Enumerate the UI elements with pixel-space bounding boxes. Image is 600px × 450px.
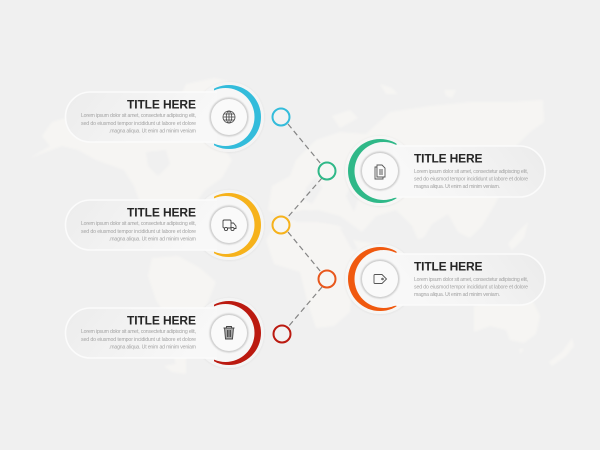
map shading xyxy=(146,150,446,254)
body text xyxy=(81,221,196,243)
body text: Lorem ipsum dolor sit amet, consectetur adipiscing elit, xyxy=(414,277,528,283)
body text xyxy=(81,329,196,351)
icon: truck xyxy=(223,220,236,231)
body text: sed do eiusmod tempor incididunt ut labore et dolore xyxy=(414,176,528,182)
title: TITLE HERE xyxy=(127,206,196,220)
node: yellow xyxy=(272,216,290,234)
node: orange xyxy=(318,270,336,288)
body text: .magna aliqua. Ut enim ad minim veniam xyxy=(109,237,196,243)
world map xyxy=(30,78,574,374)
body text: magna aliqua. Ut enim ad minim veniam. xyxy=(414,292,500,298)
icon: tag xyxy=(374,274,386,284)
body text: Lorem ipsum dolor sit amet, consectetur adipiscing elit, xyxy=(414,169,528,175)
body text: Lorem ipsum dolor sit amet, consectetur adipiscing elit, xyxy=(81,329,196,335)
panel: tag item xyxy=(345,244,545,314)
panel: trash item xyxy=(66,298,264,368)
body text: Lorem ipsum dolor sit amet, consectetur adipiscing elit, xyxy=(81,221,196,227)
node: green xyxy=(318,162,336,180)
title: TITLE HERE xyxy=(127,314,196,328)
title: TITLE HERE xyxy=(127,98,196,112)
icon: globe xyxy=(223,111,235,123)
body text: .magna aliqua. Ut enim ad minim veniam xyxy=(109,345,196,351)
body text xyxy=(414,277,528,298)
body text: sed do eiusmod tempor incididunt ut labore et dolore xyxy=(414,284,528,290)
body text: sed do eiusmod tempor incididunt ut labore et dolore xyxy=(81,337,196,343)
node: blue xyxy=(272,108,290,126)
panel: truck item xyxy=(66,190,264,260)
body text xyxy=(414,169,528,190)
icon: document xyxy=(375,165,385,179)
body text: magna aliqua. Ut enim ad minim veniam. xyxy=(414,184,500,190)
panel: globe item xyxy=(66,82,264,152)
title: TITLE HERE xyxy=(414,260,482,274)
body text: sed do eiusmod tempor incididunt ut labore et dolore xyxy=(81,121,196,127)
body text: Lorem ipsum dolor sit amet, consectetur adipiscing elit, xyxy=(81,113,196,119)
icon: trash xyxy=(224,326,234,339)
connector: dashed lines xyxy=(287,124,322,327)
panel: document item xyxy=(345,136,545,206)
title: TITLE HERE xyxy=(414,152,482,166)
body text: .magna aliqua. Ut enim ad minim veniam xyxy=(109,129,196,135)
node: red xyxy=(274,326,290,342)
body text: sed do eiusmod tempor incididunt ut labore et dolore xyxy=(81,229,196,235)
body text xyxy=(81,113,196,135)
